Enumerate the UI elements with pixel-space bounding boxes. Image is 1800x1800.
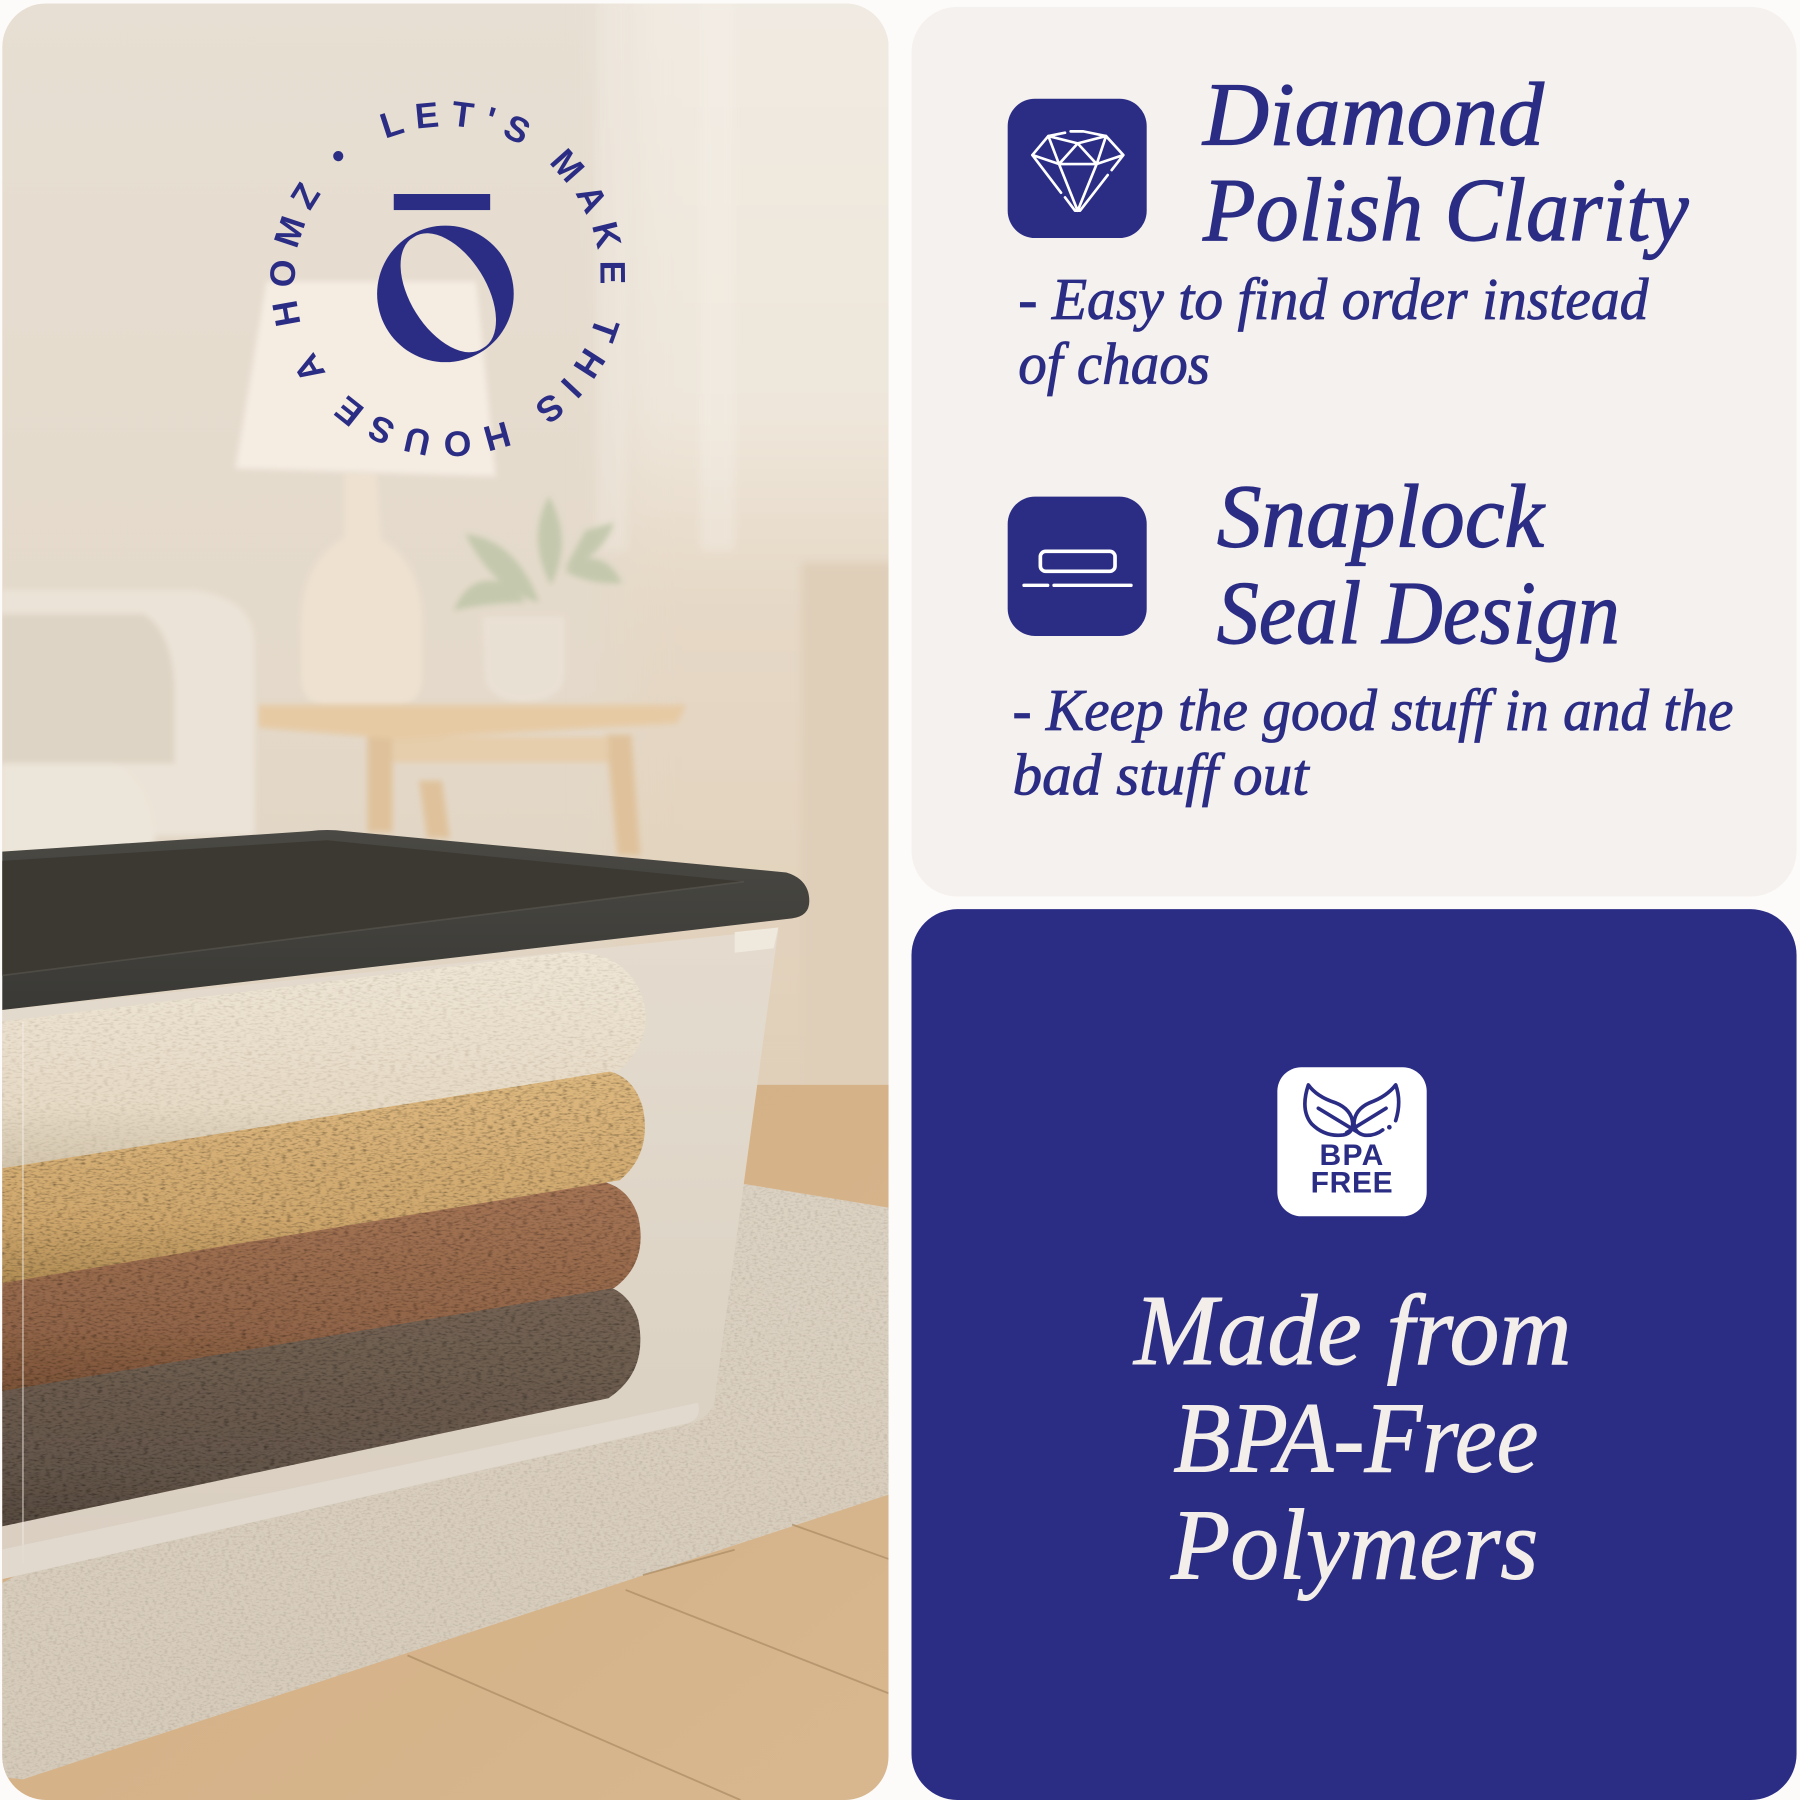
text: keep the good stuff: bad stuff out [1013,741,1310,807]
logo: circular badge [270,101,625,456]
icon: diamond [1008,99,1147,238]
panel: BPA free [911,909,1797,1800]
towel: dark brown [0,1283,640,1527]
heading: Diamond Polish Clarity: Polish Clarity [1202,161,1689,260]
heading: Diamond Polish Clarity [1202,66,1689,260]
heading: Snaplock Seal Design [1217,467,1620,663]
box corner line [22,1022,24,1564]
towel stack [0,952,646,1527]
floor [0,1085,895,1800]
storage box [0,928,778,1580]
box front film [2,1072,644,1526]
text: easy to find [1018,266,1649,396]
panel: features [911,7,1797,897]
icon: BPA free badge: FREE [1311,1167,1393,1200]
panel: lifestyle photo [0,0,964,1800]
towel: cream [0,952,646,1169]
heading: Snaplock Seal Design: Seal Design [1217,564,1620,663]
heading: Made from BPA-Free Polymers: Made from [1132,1274,1572,1386]
text: easy to find: - Easy to find order instead [1018,266,1649,332]
box body [0,930,778,1580]
heading: Made from BPA-Free Polymers: Polymers [1170,1488,1538,1600]
icon: BPA free badge: BPA [1319,1139,1385,1172]
box bottom rim [0,1403,699,1580]
plant [453,496,622,703]
logo mark: o with macron [377,194,514,362]
circular slogan: LET'S MAKE THIS HOUSE A HOMZ • [270,101,625,456]
lamp [235,281,496,706]
towel: rust brown [0,1180,641,1391]
curtain [602,4,888,548]
heading: Snaplock Seal Design: Snaplock [1217,467,1546,566]
text: keep the good stuff [1013,677,1733,807]
text: keep the good stuff: - Keep the good stuff in and the [1013,677,1733,743]
wall background [0,0,895,1148]
icon: snaplock seal [1008,497,1147,636]
armchair [0,590,255,855]
heading: Diamond Polish Clarity: Diamond [1202,66,1544,165]
icon: BPA free badge [1277,1067,1427,1216]
floor boards [408,1524,889,1800]
curtain lower edge [802,562,888,782]
text: easy to find: of chaos [1018,330,1210,396]
side table [258,705,686,855]
rug [0,1182,889,1779]
box rim corner [735,928,778,953]
lid [0,830,809,1010]
heading: Made from BPA-Free Polymers [1132,1274,1572,1600]
heading: Made from BPA-Free Polymers: BPA-Free [1173,1382,1538,1494]
towel: mustard [0,1070,645,1283]
